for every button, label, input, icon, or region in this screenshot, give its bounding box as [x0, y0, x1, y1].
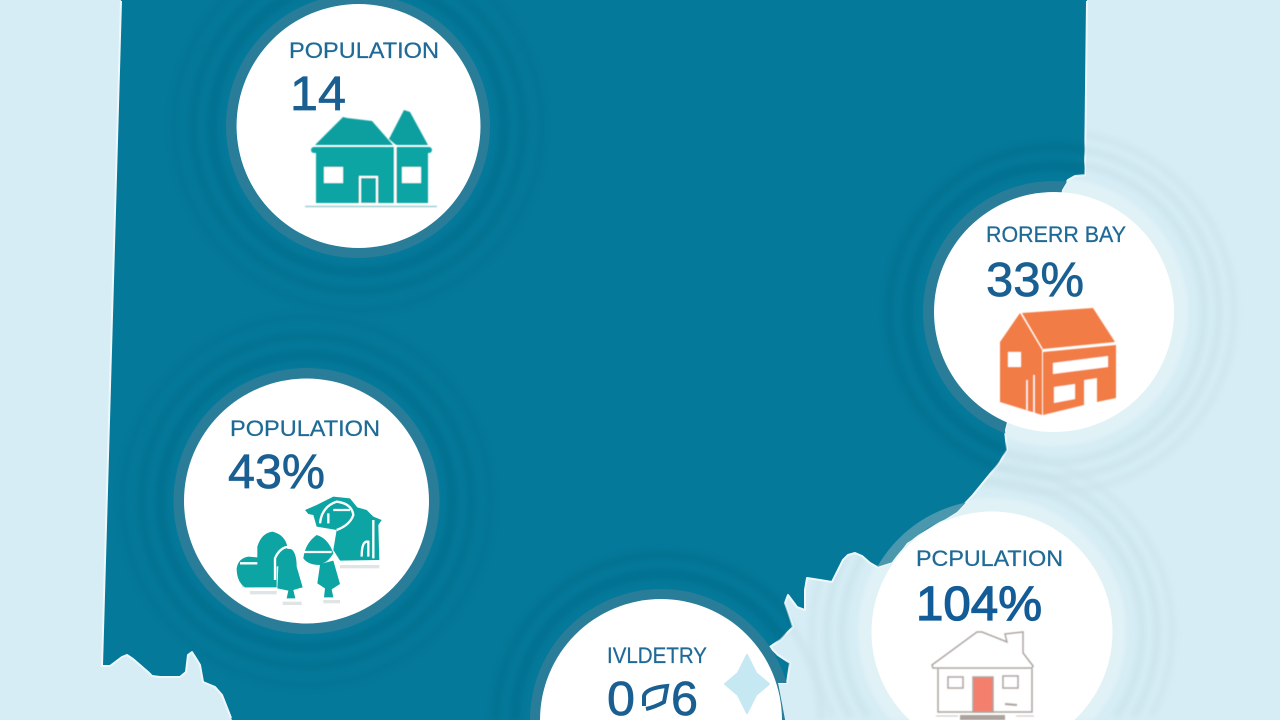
icon: village and people [237, 497, 382, 603]
panel: population 43% [184, 378, 429, 624]
label: population: POPULATION [289, 38, 439, 63]
panel: population 14 [236, 4, 480, 248]
icon: teal house [305, 110, 437, 206]
value: 14: 14 [290, 68, 346, 121]
label: rorerr bay: RORERR BAY [986, 222, 1126, 247]
map shape [102, 0, 1087, 720]
icon: garbled glyph [644, 686, 667, 709]
panel: rorerr bay 33% [934, 192, 1174, 432]
value: 33%: 33% [986, 254, 1084, 307]
light ripples outside the map [501, 132, 1234, 720]
value: 104%: 104% [916, 578, 1042, 631]
icon: outlined house [932, 632, 1034, 720]
label: ivldetry: IVLDETRY [607, 643, 707, 668]
panel: population 104% [872, 511, 1112, 720]
value: 43%: 43% [228, 446, 325, 499]
label: population: POPULATION [230, 416, 380, 441]
panel: industry [540, 599, 782, 720]
icon: sparkle star [725, 655, 769, 713]
dark ripples inside the map [158, 0, 1086, 720]
label: pcpulation: PCPULATION [916, 546, 1063, 571]
icon: orange house [1000, 308, 1116, 415]
map coastline edge [102, 1, 1087, 718]
